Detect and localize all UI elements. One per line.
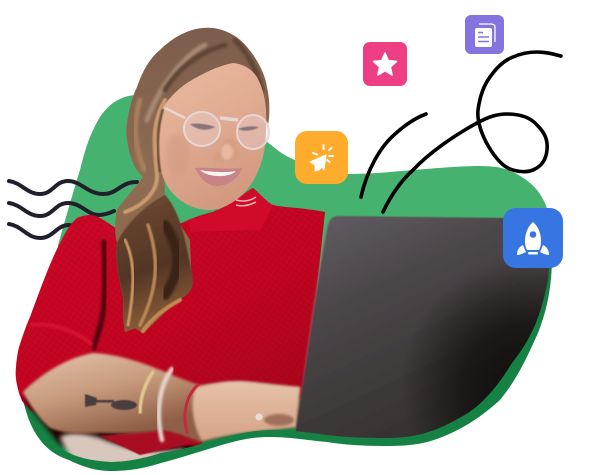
black scribble curve loop (383, 52, 561, 212)
cheek shading (170, 136, 185, 152)
face (157, 63, 266, 210)
laptop (295, 216, 549, 438)
laptop dark corner (416, 273, 548, 432)
icon: cursor click (295, 131, 348, 184)
white cloth (57, 432, 186, 462)
wavy lines (9, 181, 137, 238)
sleeve fold shadow (93, 240, 105, 350)
tattoo (85, 394, 137, 410)
hair strands (125, 40, 262, 331)
sleeve fold highlight (30, 324, 93, 345)
icon: star (363, 42, 407, 86)
arm (23, 353, 300, 442)
hand shadow (264, 414, 294, 426)
hair shadow along face (158, 109, 163, 172)
icon: rocket (503, 208, 563, 268)
sweater collar over neck (190, 188, 273, 232)
ring (256, 414, 262, 420)
collar detail (236, 197, 256, 206)
icon: documents (465, 15, 504, 54)
sweater knit texture (8, 188, 325, 445)
nose shading (226, 142, 234, 143)
sweater (8, 188, 325, 460)
dark green blob edge (16, 262, 552, 471)
eyes (190, 124, 259, 131)
hair: crown and side (115, 28, 269, 333)
laptop edge blur (294, 218, 330, 432)
nose highlight (221, 144, 233, 160)
hair: lower wavy section (116, 195, 193, 333)
light green blob (58, 90, 548, 300)
glasses (165, 108, 269, 149)
hand (193, 381, 300, 441)
black scribble curve short (361, 114, 426, 197)
red sweater lower (100, 430, 200, 455)
shadow below arm (20, 395, 200, 465)
smile (195, 168, 242, 186)
bracelets (140, 369, 198, 440)
